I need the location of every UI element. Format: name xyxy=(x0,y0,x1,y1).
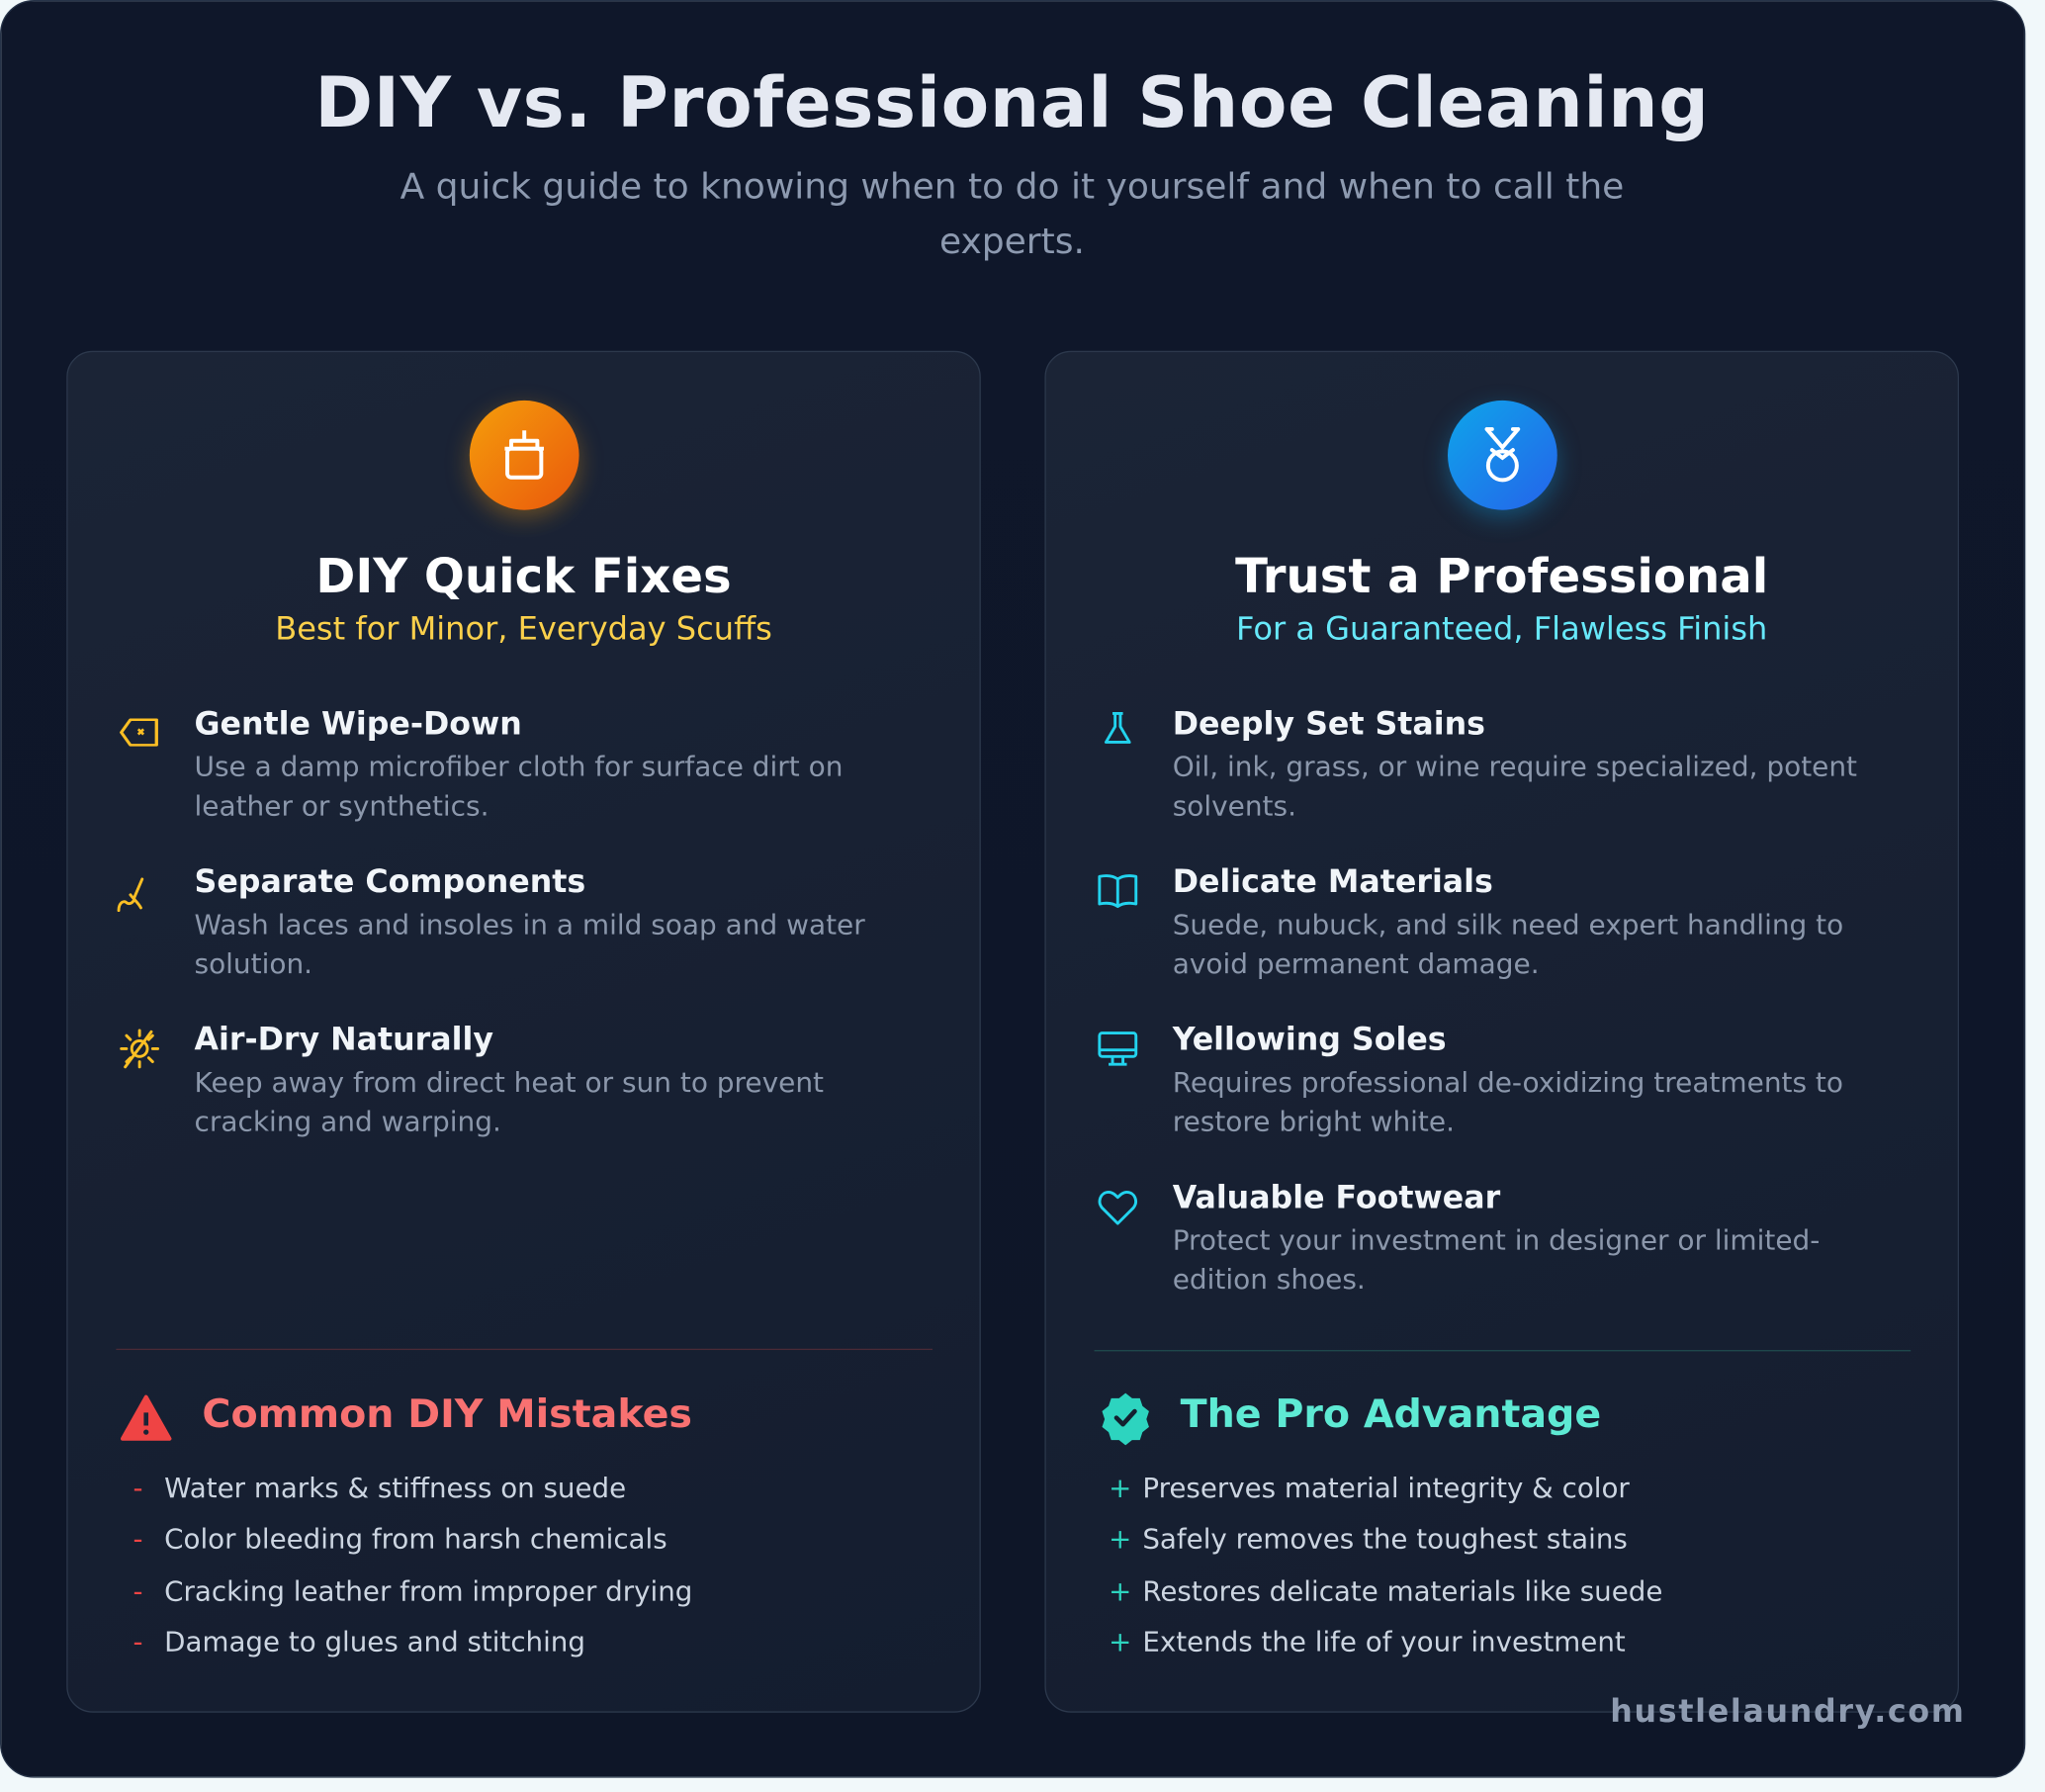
item: soles: Requires professional de-oxidizing treatments to restore bright white. xyxy=(1173,1066,1843,1137)
icon: pro xyxy=(1448,401,1557,510)
subtitle: A quick guide to knowing when to do it yourself and when to call the experts. xyxy=(400,167,1624,262)
icon: no sun xyxy=(120,1029,159,1068)
list: mistakes: Color bleeding from harsh chemicals xyxy=(164,1524,667,1556)
icon: warning xyxy=(121,1394,172,1441)
divider xyxy=(1095,1350,1911,1351)
list: advantages: Preserves material integrity & color xyxy=(1142,1473,1630,1504)
item: soles: Yellowing Soles xyxy=(1173,1022,1447,1058)
list: advantages: Restores delicate materials like suede xyxy=(1142,1575,1662,1606)
list: advantages: + xyxy=(1109,1473,1131,1504)
list: advantages: + xyxy=(1109,1575,1131,1606)
footer: website: hustlelaundry.com xyxy=(1610,1693,1966,1730)
list: mistakes: - xyxy=(133,1524,143,1556)
icon: flask xyxy=(1104,712,1131,744)
title: DIY vs. Professional Shoe Cleaning xyxy=(314,61,1710,143)
icon: badge check xyxy=(1102,1392,1149,1446)
item: materials: Delicate Materials xyxy=(1173,863,1493,900)
item: footwear: Protect your investment in designer or limited-edition shoes. xyxy=(1173,1223,1820,1296)
list: mistakes: Water marks & stiffness on suede xyxy=(164,1473,626,1504)
item: footwear xyxy=(1173,1179,1820,1296)
item: air-dry: Keep away from direct heat or sun to prevent cracking and warping. xyxy=(195,1066,824,1137)
icon: heart xyxy=(1098,1191,1137,1225)
item: components: Wash laces and insoles in a mild soap and water solution. xyxy=(195,908,865,979)
list: advantages: + xyxy=(1109,1627,1131,1658)
item: stains: Oil, ink, grass, or wine require specialized, potent solvents. xyxy=(1173,750,1857,822)
panel: DIY xyxy=(66,351,981,1713)
item: stains: Deeply Set Stains xyxy=(1173,706,1485,742)
header: mistakes: Common DIY Mistakes xyxy=(202,1391,692,1437)
list: mistakes: - xyxy=(133,1627,143,1658)
list: mistakes: Cracking leather from improper drying xyxy=(164,1575,692,1606)
panel: professional xyxy=(1044,351,1959,1713)
item: soles xyxy=(1173,1022,1843,1137)
icon: book xyxy=(1098,874,1137,908)
item: materials: Suede, nubuck, and silk need expert handling to avoid permanent damage. xyxy=(1173,908,1843,979)
divider xyxy=(116,1349,933,1350)
item: footwear: Valuable Footwear xyxy=(1173,1179,1500,1215)
list: mistakes: Damage to glues and stitching xyxy=(164,1627,585,1658)
item: wipe-down: Gentle Wipe-Down xyxy=(195,706,522,742)
list: advantages: Safely removes the toughest stains xyxy=(1142,1524,1628,1556)
icon: bottle xyxy=(470,401,579,510)
tagline: Best for Minor, Everyday Scuffs xyxy=(275,609,772,647)
heading: Trust a Professional xyxy=(1235,548,1768,604)
item: wipe-down xyxy=(195,706,843,822)
list: advantages: Extends the life of your investment xyxy=(1142,1627,1626,1658)
item: components: Separate Components xyxy=(195,863,585,900)
item: stains xyxy=(1173,706,1857,822)
list: mistakes xyxy=(133,1473,692,1658)
heading: DIY Quick Fixes xyxy=(315,548,732,604)
item: air-dry xyxy=(194,1022,824,1137)
icon: monitor xyxy=(1098,1031,1137,1066)
list: advantages xyxy=(1109,1473,1662,1658)
icon: lace xyxy=(117,877,144,912)
list: advantages: + xyxy=(1109,1524,1131,1556)
item: components xyxy=(195,863,865,979)
item: wipe-down: Use a damp microfiber cloth for surface dirt on leather or synthetics. xyxy=(195,750,843,822)
tagline: For a Guaranteed, Flawless Finish xyxy=(1236,609,1767,647)
header: advantage: The Pro Advantage xyxy=(1181,1391,1601,1437)
item: materials xyxy=(1173,863,1843,979)
icon: wipe xyxy=(120,718,158,747)
list: mistakes: - xyxy=(133,1575,143,1606)
list: mistakes: - xyxy=(133,1473,143,1504)
item: air-dry: Air-Dry Naturally xyxy=(195,1022,493,1058)
